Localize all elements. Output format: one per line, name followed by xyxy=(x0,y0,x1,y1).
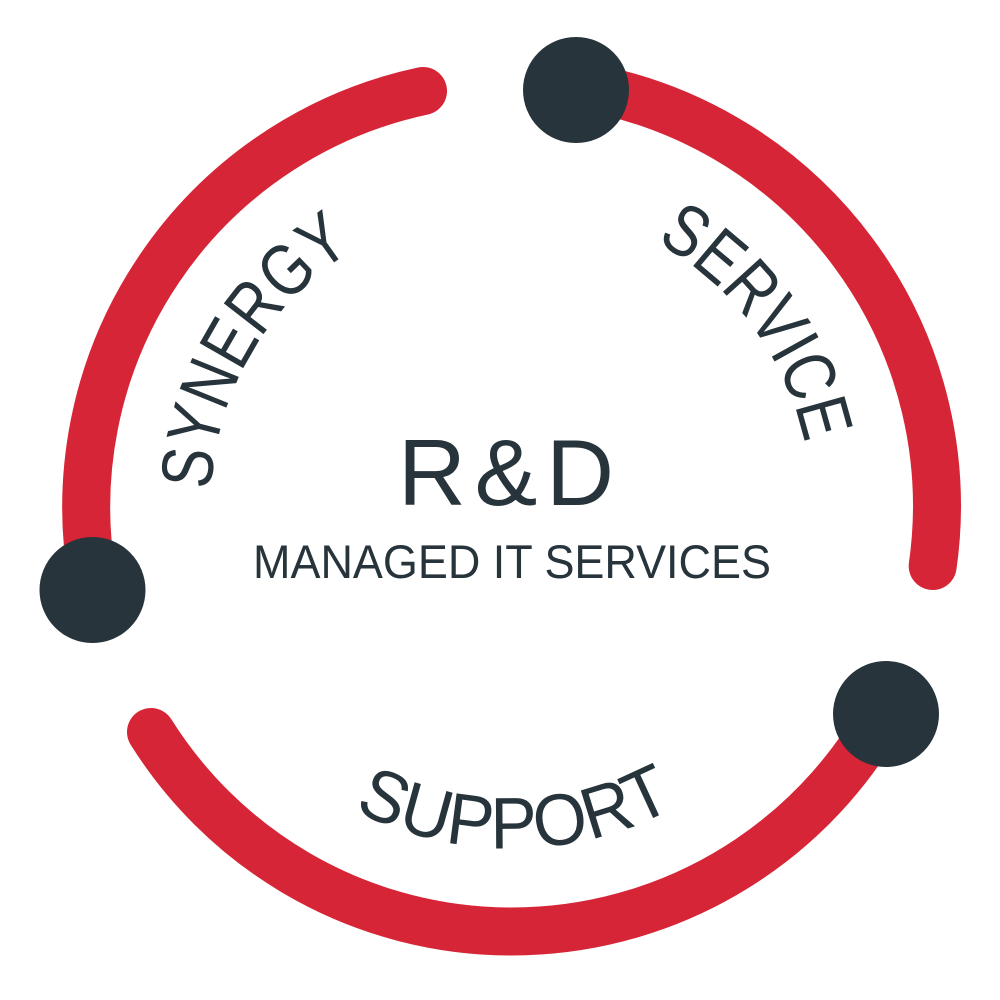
label: synergy: SYNERGY xyxy=(162,209,338,486)
label: service: SERVICE xyxy=(664,206,853,441)
node: support end xyxy=(833,661,939,767)
center title: R&D xyxy=(398,420,614,525)
label: support: SUPPORT xyxy=(361,762,659,848)
node: service start xyxy=(523,37,629,143)
arc: synergy xyxy=(86,91,423,580)
arc: service xyxy=(576,85,937,566)
arc: support xyxy=(151,708,886,931)
node: synergy start xyxy=(40,537,146,643)
center subtitle: MANAGED IT SERVICES xyxy=(253,535,771,588)
